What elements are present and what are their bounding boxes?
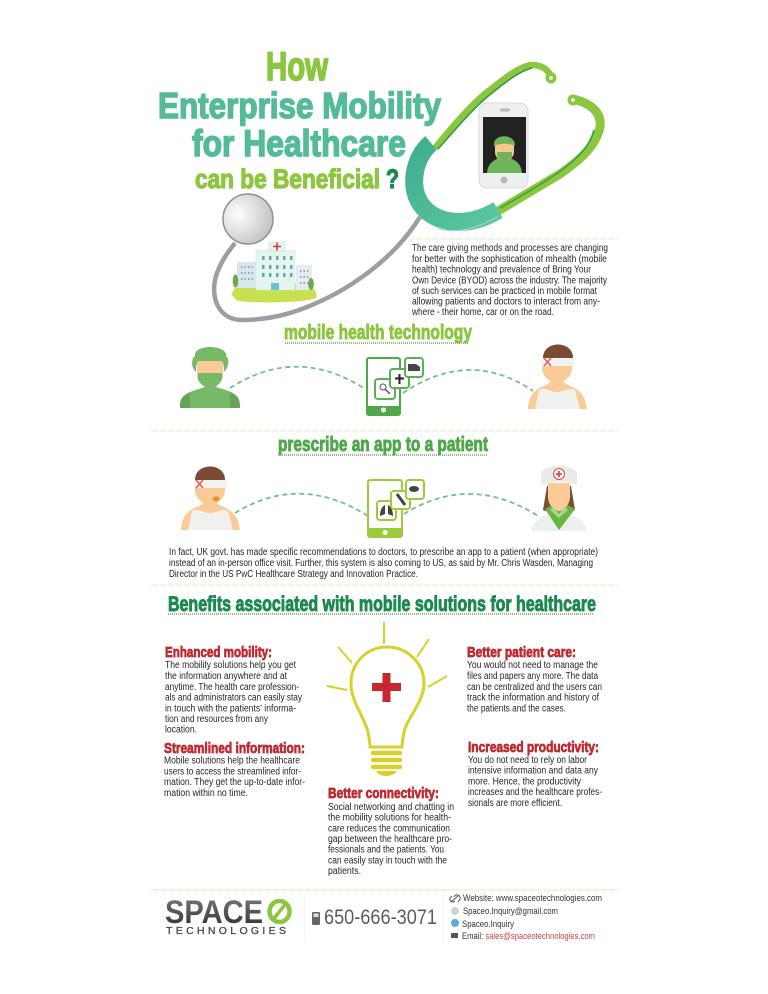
title — [158, 45, 441, 194]
benefit: enhanced mobility: location. — [165, 724, 197, 736]
icon: bandaged patient — [528, 344, 587, 409]
icon: phone with health apps — [367, 358, 423, 415]
benefit: better patient care: You would not need to manage the — [467, 660, 598, 671]
benefit: better connectivity: can easily stay in touch with the — [328, 856, 447, 866]
benefit: enhanced mobility: anytime. The health care profession- — [165, 682, 299, 693]
text block: UK recommendation: Director in the US PwC Healthcare Strategy and Innovation Practice. — [169, 569, 418, 580]
contact details — [450, 893, 602, 941]
icon: phone with prescription apps — [368, 480, 424, 537]
icon: hospital — [232, 242, 317, 302]
benefit: increased productivity: sionals are more efficient. — [468, 798, 562, 809]
intro text block: health) technology and prevalence of Bring Your — [412, 264, 592, 276]
icon: doctor — [180, 347, 240, 408]
benefit: streamlined information — [164, 740, 305, 799]
text block: UK recommendation: In fact, UK govt. has made specific recommendations to doctors, to prescribe an app to a patient (when appropriate) — [169, 547, 598, 558]
title: for Healthcare — [192, 123, 406, 164]
heading: prescribe an app to a patient: prescribe an app to a patient — [278, 434, 488, 456]
arrow: patient to app — [235, 494, 368, 516]
benefit: increased productivity: Increased productivity: — [468, 739, 599, 756]
logo: Space-O Technologies: SPACE — [165, 894, 263, 930]
benefit: increased productivity: more. Hence, the productivity — [468, 776, 581, 788]
benefit: better patient care — [467, 644, 602, 714]
benefit: better connectivity: Social networking and chatting in — [328, 802, 454, 813]
benefit: enhanced mobility — [165, 644, 302, 736]
benefit: better connectivity: fessionals and the patients. You — [328, 844, 444, 856]
benefit: streamlined information: mation within no time. — [164, 788, 248, 799]
phone number: 650-666-3071 — [324, 906, 437, 929]
benefit: streamlined information: mation. They get the up-to-date infor- — [164, 777, 305, 788]
intro text block: The care giving methods and processes are changing — [412, 243, 608, 254]
intro text block: for better with the sophistication of mhealth (mobile — [412, 254, 607, 265]
benefit: increased productivity: intensive information and data any — [468, 766, 598, 776]
benefit: better connectivity — [328, 785, 454, 877]
benefit: better patient care: track the information and history of — [467, 692, 599, 704]
contact details: Email: sales@spaceotechnologies.com — [462, 931, 595, 941]
divider lines — [150, 239, 618, 943]
benefit: better connectivity: Better connectivity: — [328, 785, 439, 802]
benefit: enhanced mobility: Enhanced mobility: — [165, 644, 272, 661]
intro text block — [411, 243, 608, 318]
benefit: better patient care: can be centralized and the users can — [467, 682, 602, 693]
stethoscope — [214, 65, 600, 320]
intro text block: allowing patients and doctors to interact from any- — [412, 296, 600, 308]
icon: light bulb with cross — [327, 622, 447, 776]
title: can be Beneficial — [195, 164, 380, 194]
benefit: better connectivity: patients. — [328, 866, 361, 877]
title: ? — [386, 164, 399, 194]
contact details: Spaceo.Inquiry@gmail.com — [463, 906, 558, 916]
intro text block: of such services can be practiced in mobile format — [412, 286, 597, 297]
benefit: better patient care: files and papers any more. The data — [467, 671, 598, 682]
text block: UK recommendation: instead of an in-person office visit. Further, this system is also coming to US, as said by Mr. Chris Wasden, Managing — [169, 558, 593, 569]
arrow: doctor to app — [230, 367, 365, 389]
icon: envelope — [451, 933, 458, 938]
benefit: enhanced mobility: The mobility solutions help you get — [165, 660, 296, 671]
arrow: app to nurse — [404, 494, 538, 516]
title: How — [266, 45, 329, 89]
benefit: enhanced mobility: als and administrators can easily stay — [165, 692, 302, 704]
benefit: streamlined information: Mobile solutions help the healthcare — [164, 756, 300, 766]
icon: link — [450, 895, 460, 902]
intro text block: where - their home, car or on the road. — [411, 307, 554, 318]
benefit: better patient care: Better patient care: — [467, 644, 576, 661]
icon: gmail — [451, 907, 459, 915]
icon: injured patient — [181, 466, 240, 530]
contact details: Spaceo.Inquiry — [462, 919, 515, 929]
benefit: better connectivity: gap between the healthcare pro- — [328, 834, 452, 845]
benefit: increased productivity: increases and the healthcare profes- — [468, 787, 602, 798]
icon: nurse — [531, 466, 587, 531]
icon: skype — [451, 919, 459, 927]
logo: Space-O Technologies: TECHNOLOGIES — [166, 925, 286, 937]
benefit: better connectivity: care reduces the communication — [328, 824, 450, 834]
heading: benefits: Benefits associated with mobile solutions for healthcare — [168, 593, 596, 616]
benefit: better patient care: the patients and the cases. — [467, 704, 566, 714]
benefit: streamlined information: Streamlined information: — [164, 740, 305, 757]
benefit: enhanced mobility: the information anywhere and at — [165, 671, 287, 682]
text block: UK recommendation — [169, 547, 598, 580]
benefit: increased productivity — [468, 739, 602, 809]
benefit: better connectivity: the mobility solutions for health- — [328, 812, 451, 824]
arrow: app to patient — [403, 370, 533, 393]
benefit: streamlined information: users to access the streamlined infor- — [164, 766, 301, 778]
heading: mobile health technology: mobile health technology — [284, 322, 473, 344]
benefit: enhanced mobility: in touch with the patients' informa- — [165, 704, 296, 714]
intro text block: Own Device (BYOD) across the industry. The majority — [412, 276, 607, 286]
contact details: Website: www.spaceotechnologies.com — [463, 893, 602, 903]
icon: smartphone with doctor — [479, 103, 528, 188]
benefit: enhanced mobility: tion and resources from any — [165, 714, 268, 725]
title: Enterprise Mobility — [158, 85, 441, 126]
benefit: increased productivity: You do not need to rely on labor — [468, 755, 588, 766]
